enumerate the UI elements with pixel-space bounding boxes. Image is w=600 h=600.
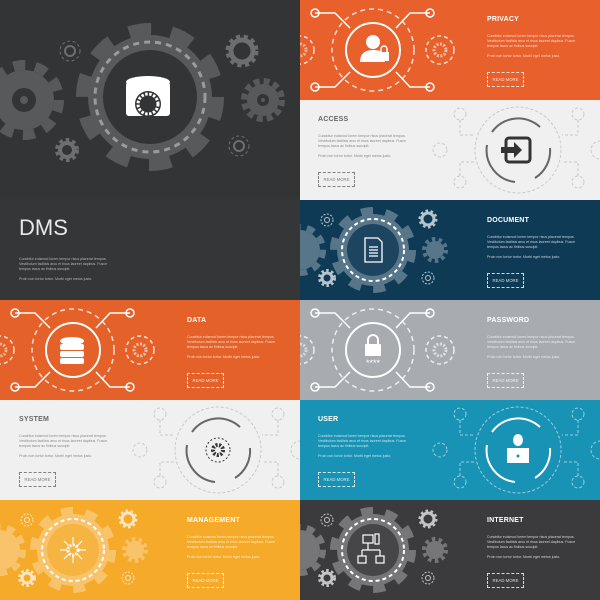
text block: SYSTEM (19, 416, 107, 487)
text block: USER (318, 416, 406, 487)
text block: DMS description (19, 257, 107, 281)
icon: user laptop (507, 434, 529, 463)
text block: ACCESS: READ MORE (323, 177, 350, 182)
text block: PASSWORD: Curabitur euismod lorem tempor risus placerat tempus. Vestibulum facilisis arcu et risus laoreet dapibus. Fusce tempus lacus ac finibus suscipit. (487, 335, 575, 349)
text block: PRIVACY: Curabitur euismod lorem tempor risus placerat tempus. Vestibulum facilisis arcu et risus laoreet dapibus. Fusce tempus lacus ac finibus suscipit. (487, 34, 575, 48)
text block: MANAGEMENT: Curabitur euismod lorem tempor risus placerat tempus. Vestibulum facilisis arcu et risus laoreet dapibus. Fusce tempus lacus ac finibus suscipit. (187, 535, 275, 549)
text block: PRIVACY: Proin non tortor tortor. Morbi eget metus justo. (487, 54, 560, 58)
text block: PRIVACY (487, 16, 575, 87)
text block: SYSTEM: SYSTEM (19, 416, 49, 423)
icon: document (365, 238, 382, 262)
text block: SYSTEM: Curabitur euismod lorem tempor risus placerat tempus. Vestibulum facilisis arcu et risus laoreet dapibus. Fusce tempus lacus ac finibus suscipit. (19, 434, 107, 448)
text block: USER: READ MORE (323, 477, 350, 482)
icon: lock password: **** (366, 358, 380, 368)
text block: SYSTEM: Proin non tortor tortor. Morbi eget metus justo. (19, 454, 92, 458)
text block: INTERNET: Curabitur euismod lorem tempor risus placerat tempus. Vestibulum facilisis arcu et risus laoreet dapibus. Fusce tempus lacus ac finibus suscipit. (487, 535, 575, 549)
text block: INTERNET (487, 517, 575, 588)
text block: MANAGEMENT: MANAGEMENT (187, 517, 240, 524)
panel: MANAGEMENT (0, 500, 300, 600)
panel: ACCESS (300, 100, 600, 200)
panel: USER (300, 400, 600, 500)
text block: DOCUMENT (487, 217, 575, 288)
text block: DOCUMENT: Curabitur euismod lorem tempor risus placerat tempus. Vestibulum facilisis arcu et risus laoreet dapibus. Fusce tempus lacus ac finibus suscipit. (487, 235, 575, 249)
text block: DATA: Curabitur euismod lorem tempor risus placerat tempus. Vestibulum facilisis arcu et risus laoreet dapibus. Fusce tempus lacus ac finibus suscipit. (187, 335, 275, 349)
text block: PASSWORD (487, 317, 575, 388)
icon: user lock (360, 35, 389, 62)
icon: network (358, 534, 384, 563)
text block: ACCESS: Curabitur euismod lorem tempor risus placerat tempus. Vestibulum facilisis arcu et risus laoreet dapibus. Fusce tempus lacus ac finibus suscipit. (318, 134, 406, 148)
text block: ACCESS: ACCESS (318, 116, 348, 123)
panel: DATA (0, 300, 300, 400)
text block: DATA: Proin non tortor tortor. Morbi eget metus justo. (187, 355, 260, 359)
text block: DOCUMENT: DOCUMENT (487, 217, 529, 224)
text block: INTERNET: Proin non tortor tortor. Morbi eget metus justo. (487, 555, 560, 559)
icon: sign-in (501, 138, 530, 162)
text block: PRIVACY: READ MORE (492, 77, 519, 82)
text block: USER: Proin non tortor tortor. Morbi eget metus justo. (318, 454, 391, 458)
panel: PASSWORD (300, 300, 600, 400)
text block: USER: USER (318, 416, 338, 423)
text block: USER: Curabitur euismod lorem tempor risus placerat tempus. Vestibulum facilisis arcu et risus laoreet dapibus. Fusce tempus lacus ac finibus suscipit. (318, 434, 406, 448)
text block: MANAGEMENT (187, 517, 275, 588)
panel: DOCUMENT (300, 200, 600, 300)
panel: DMS title (0, 198, 300, 300)
text block: DATA (187, 317, 275, 388)
text block: ACCESS (318, 116, 406, 187)
text block: MANAGEMENT: READ MORE (192, 578, 219, 583)
panel: SYSTEM (0, 400, 300, 500)
icon: database (60, 337, 84, 364)
text block: PASSWORD: PASSWORD (487, 317, 529, 324)
icon: system gear (206, 438, 230, 462)
panel: INTERNET (300, 500, 600, 600)
panel: top-left gear hero (0, 0, 300, 198)
text block: INTERNET: INTERNET (487, 517, 524, 524)
text block: MANAGEMENT: Proin non tortor tortor. Morbi eget metus justo. (187, 555, 260, 559)
text block: ACCESS: Proin non tortor tortor. Morbi eget metus justo. (318, 154, 391, 158)
text block: DATA: READ MORE (192, 378, 219, 383)
text block: DOCUMENT: READ MORE (492, 278, 519, 283)
text block: PRIVACY: PRIVACY (487, 16, 519, 23)
icon: lock password (365, 335, 381, 368)
icon: management hub (60, 537, 86, 563)
text block: SYSTEM: READ MORE (24, 477, 51, 482)
big gear (0, 30, 282, 164)
icon: database gear (126, 76, 170, 117)
panel: PRIVACY (300, 0, 600, 100)
text block: DMS description: Proin non tortor tortor. Morbi eget metus justo. (19, 277, 92, 281)
text block: DATA: DATA (187, 317, 206, 324)
title: DMS: DMS (19, 215, 68, 240)
text block: DMS description: Curabitur euismod lorem tempor risus placerat tempus. Vestibulum facilisis arcu et risus laoreet dapibus. Fusce tempus lacus ac finibus suscipit. (19, 257, 107, 271)
text block: PASSWORD: Proin non tortor tortor. Morbi eget metus justo. (487, 355, 560, 359)
text block: DOCUMENT: Proin non tortor tortor. Morbi eget metus justo. (487, 255, 560, 259)
text block: INTERNET: READ MORE (492, 578, 519, 583)
text block: PASSWORD: READ MORE (492, 378, 519, 383)
